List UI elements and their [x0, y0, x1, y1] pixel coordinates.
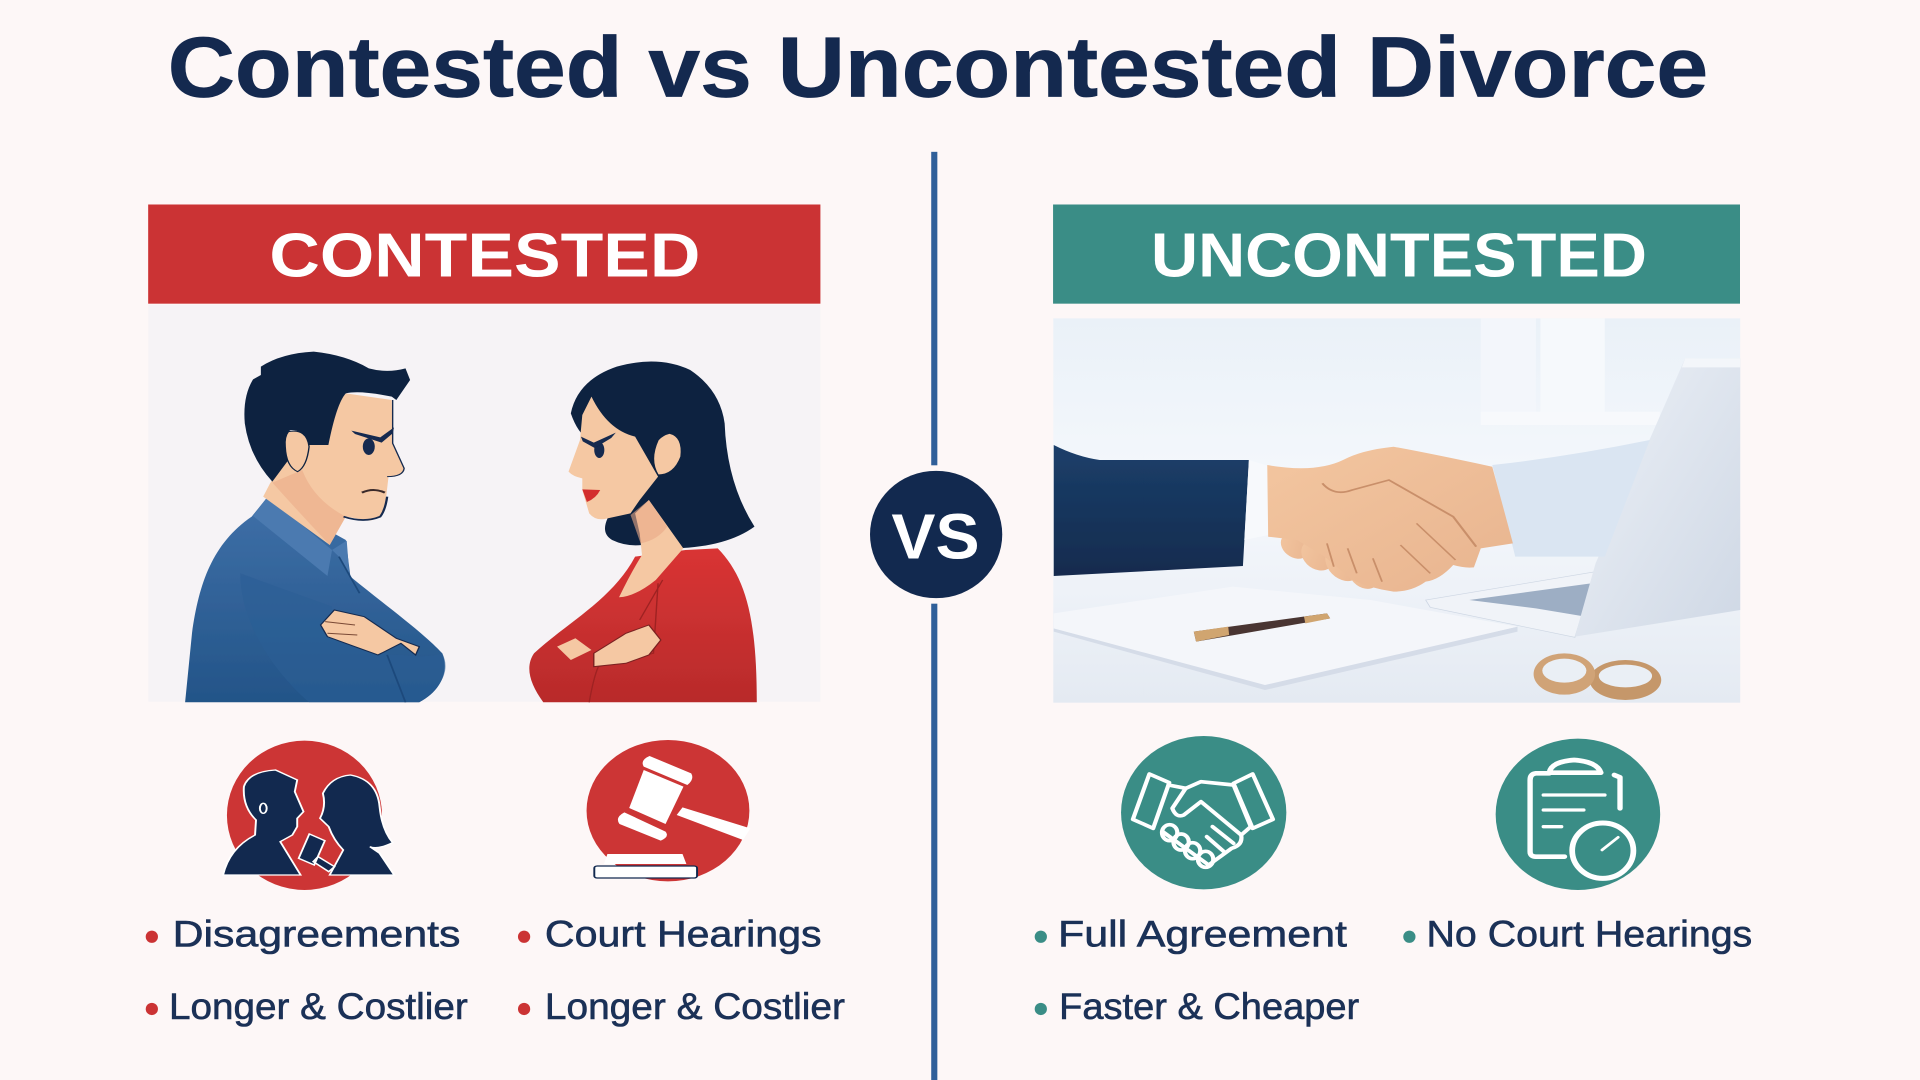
bullet list: uncontested points: Full Agreement — [1058, 914, 1347, 955]
woman figure — [529, 362, 757, 702]
bullet list: contested points: Longer & Costlier — [545, 986, 845, 1027]
title: Contested vs Uncontested Divorce — [168, 20, 1708, 116]
panel: uncontested — [1035, 204, 1752, 1027]
clasped hands — [1267, 447, 1513, 592]
illustration: arguing couple — [148, 305, 820, 702]
icon: gavel — [587, 740, 750, 881]
man figure — [185, 352, 446, 702]
shirt sleeve — [1492, 440, 1650, 557]
VS badge — [870, 471, 1002, 598]
bullet list: uncontested points — [1035, 914, 1752, 1027]
icon: couple dispute — [223, 741, 394, 890]
wedding rings — [1534, 653, 1661, 700]
contested header banner: CONTESTED — [269, 221, 700, 291]
center divider line — [931, 152, 937, 1080]
bullet list: contested points — [146, 914, 845, 1027]
bullet list: uncontested points: No Court Hearings — [1427, 914, 1752, 955]
bullet list: uncontested points: Faster & Cheaper — [1059, 986, 1359, 1027]
panel: contested — [146, 204, 845, 1027]
laptop — [1426, 358, 1740, 637]
icon: clipboard with clock — [1496, 739, 1660, 890]
photo: handshake over documents — [1053, 318, 1740, 703]
suit sleeve — [1054, 445, 1249, 576]
uncontested header banner: UNCONTESTED — [1151, 221, 1647, 291]
pen — [1194, 613, 1330, 642]
bullet list: contested points: Court Hearings — [545, 914, 822, 955]
VS badge: VS — [891, 501, 980, 572]
paper document — [1054, 587, 1518, 690]
contested header banner — [148, 204, 820, 304]
icon: handshake — [1121, 736, 1286, 889]
uncontested header banner — [1053, 204, 1740, 304]
bullet list: contested points: Disagreements — [173, 914, 460, 955]
bullet list: contested points: Longer & Costlier — [169, 986, 468, 1027]
